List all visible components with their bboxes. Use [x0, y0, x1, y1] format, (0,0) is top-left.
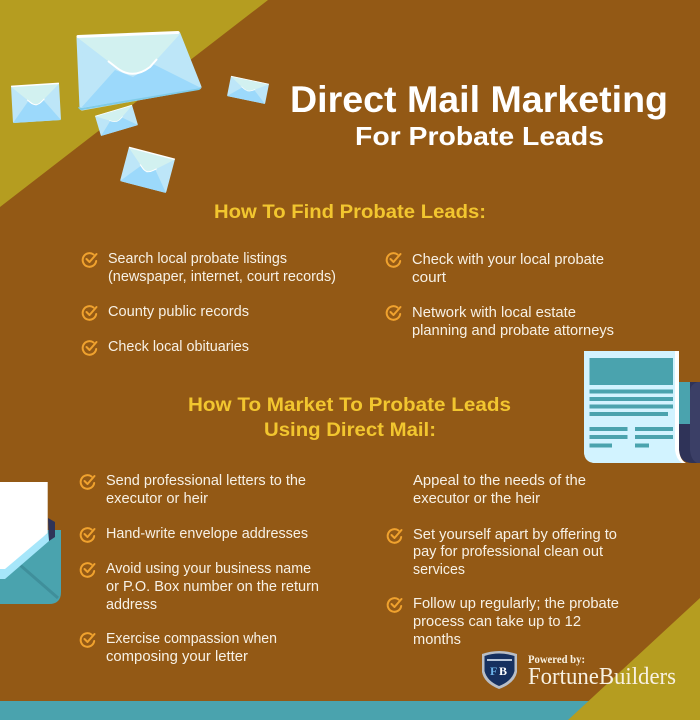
item: obituaries: Check local obituaries — [108, 339, 249, 355]
item: clean out: Set yourself apart by offering to — [413, 527, 617, 543]
item: search listings: (newspaper, internet, court records) — [108, 269, 336, 285]
item: follow up — [388, 596, 619, 648]
item: network: planning and probate attorneys — [412, 323, 614, 339]
list: market right — [388, 473, 619, 648]
icon: small envelope left — [11, 83, 61, 123]
item: network: Network with local estate — [412, 305, 576, 321]
olive corner bottom right — [568, 598, 700, 720]
item: probate court — [387, 252, 604, 286]
teal bottom strip — [0, 701, 600, 720]
list: find leads left — [83, 251, 336, 355]
item: avoid business name: Avoid using your business name — [106, 561, 311, 577]
list: market left — [81, 473, 319, 665]
heading: how to find: How To Find Probate Leads: — [214, 202, 486, 223]
title: For Probate Leads — [355, 121, 604, 151]
item: follow up: process can take up to 12 — [413, 614, 581, 630]
item: follow up: Follow up regularly; the probate — [413, 596, 619, 612]
icon: small envelope right — [227, 76, 269, 104]
list: find leads right — [387, 252, 614, 339]
icon: shield: F — [490, 664, 497, 678]
title — [290, 79, 668, 151]
item: network — [387, 305, 614, 339]
icon: newspaper — [584, 351, 700, 463]
item: clean out — [388, 527, 617, 578]
heading: how to market — [188, 395, 511, 441]
item: appeal to needs: Appeal to the needs of the — [413, 473, 586, 489]
logo: FortuneBuilders: Powered by: — [528, 652, 585, 666]
item: avoid business name — [81, 561, 319, 613]
heading: how to market: Using Direct Mail: — [264, 420, 436, 441]
item: appeal to needs — [413, 473, 586, 507]
item: county records: County public records — [108, 304, 249, 320]
item: professional letters — [81, 473, 306, 507]
item: probate court: court — [412, 270, 446, 286]
logo: FortuneBuilders — [482, 651, 676, 690]
item: compassion — [81, 631, 277, 665]
icon: large envelope — [78, 32, 201, 110]
heading: how to market: How To Market To Probate Leads — [188, 395, 511, 416]
item: search listings: Search local probate listings — [108, 251, 287, 267]
item: avoid business name: or P.O. Box number on the return — [106, 579, 319, 595]
item: probate court: Check with your local probate — [412, 252, 604, 268]
item: follow up: months — [413, 632, 461, 648]
olive corner top left — [0, 0, 268, 207]
icon: small envelope middle — [95, 105, 138, 136]
icon: shield: B — [499, 664, 507, 678]
item: professional letters: executor or heir — [106, 491, 208, 507]
item: compassion: composing your letter — [106, 649, 248, 665]
icon: open envelope with letter — [0, 482, 61, 604]
title: Direct Mail Marketing — [290, 79, 668, 120]
logo: FortuneBuilders: FortuneBuilders — [528, 664, 676, 690]
item: hand-write: Hand-write envelope addresses — [106, 526, 308, 542]
icon: envelope lower — [120, 147, 175, 193]
item: search listings — [83, 251, 336, 285]
item: appeal to needs: executor or the heir — [413, 491, 540, 507]
item: clean out: services — [413, 562, 465, 578]
item: professional letters: Send professional letters to the — [106, 473, 306, 489]
item: compassion: Exercise compassion when — [106, 631, 277, 647]
item: avoid business name: address — [106, 597, 157, 613]
icon: shield — [482, 651, 517, 689]
item: clean out: pay for professional clean out — [413, 544, 603, 560]
